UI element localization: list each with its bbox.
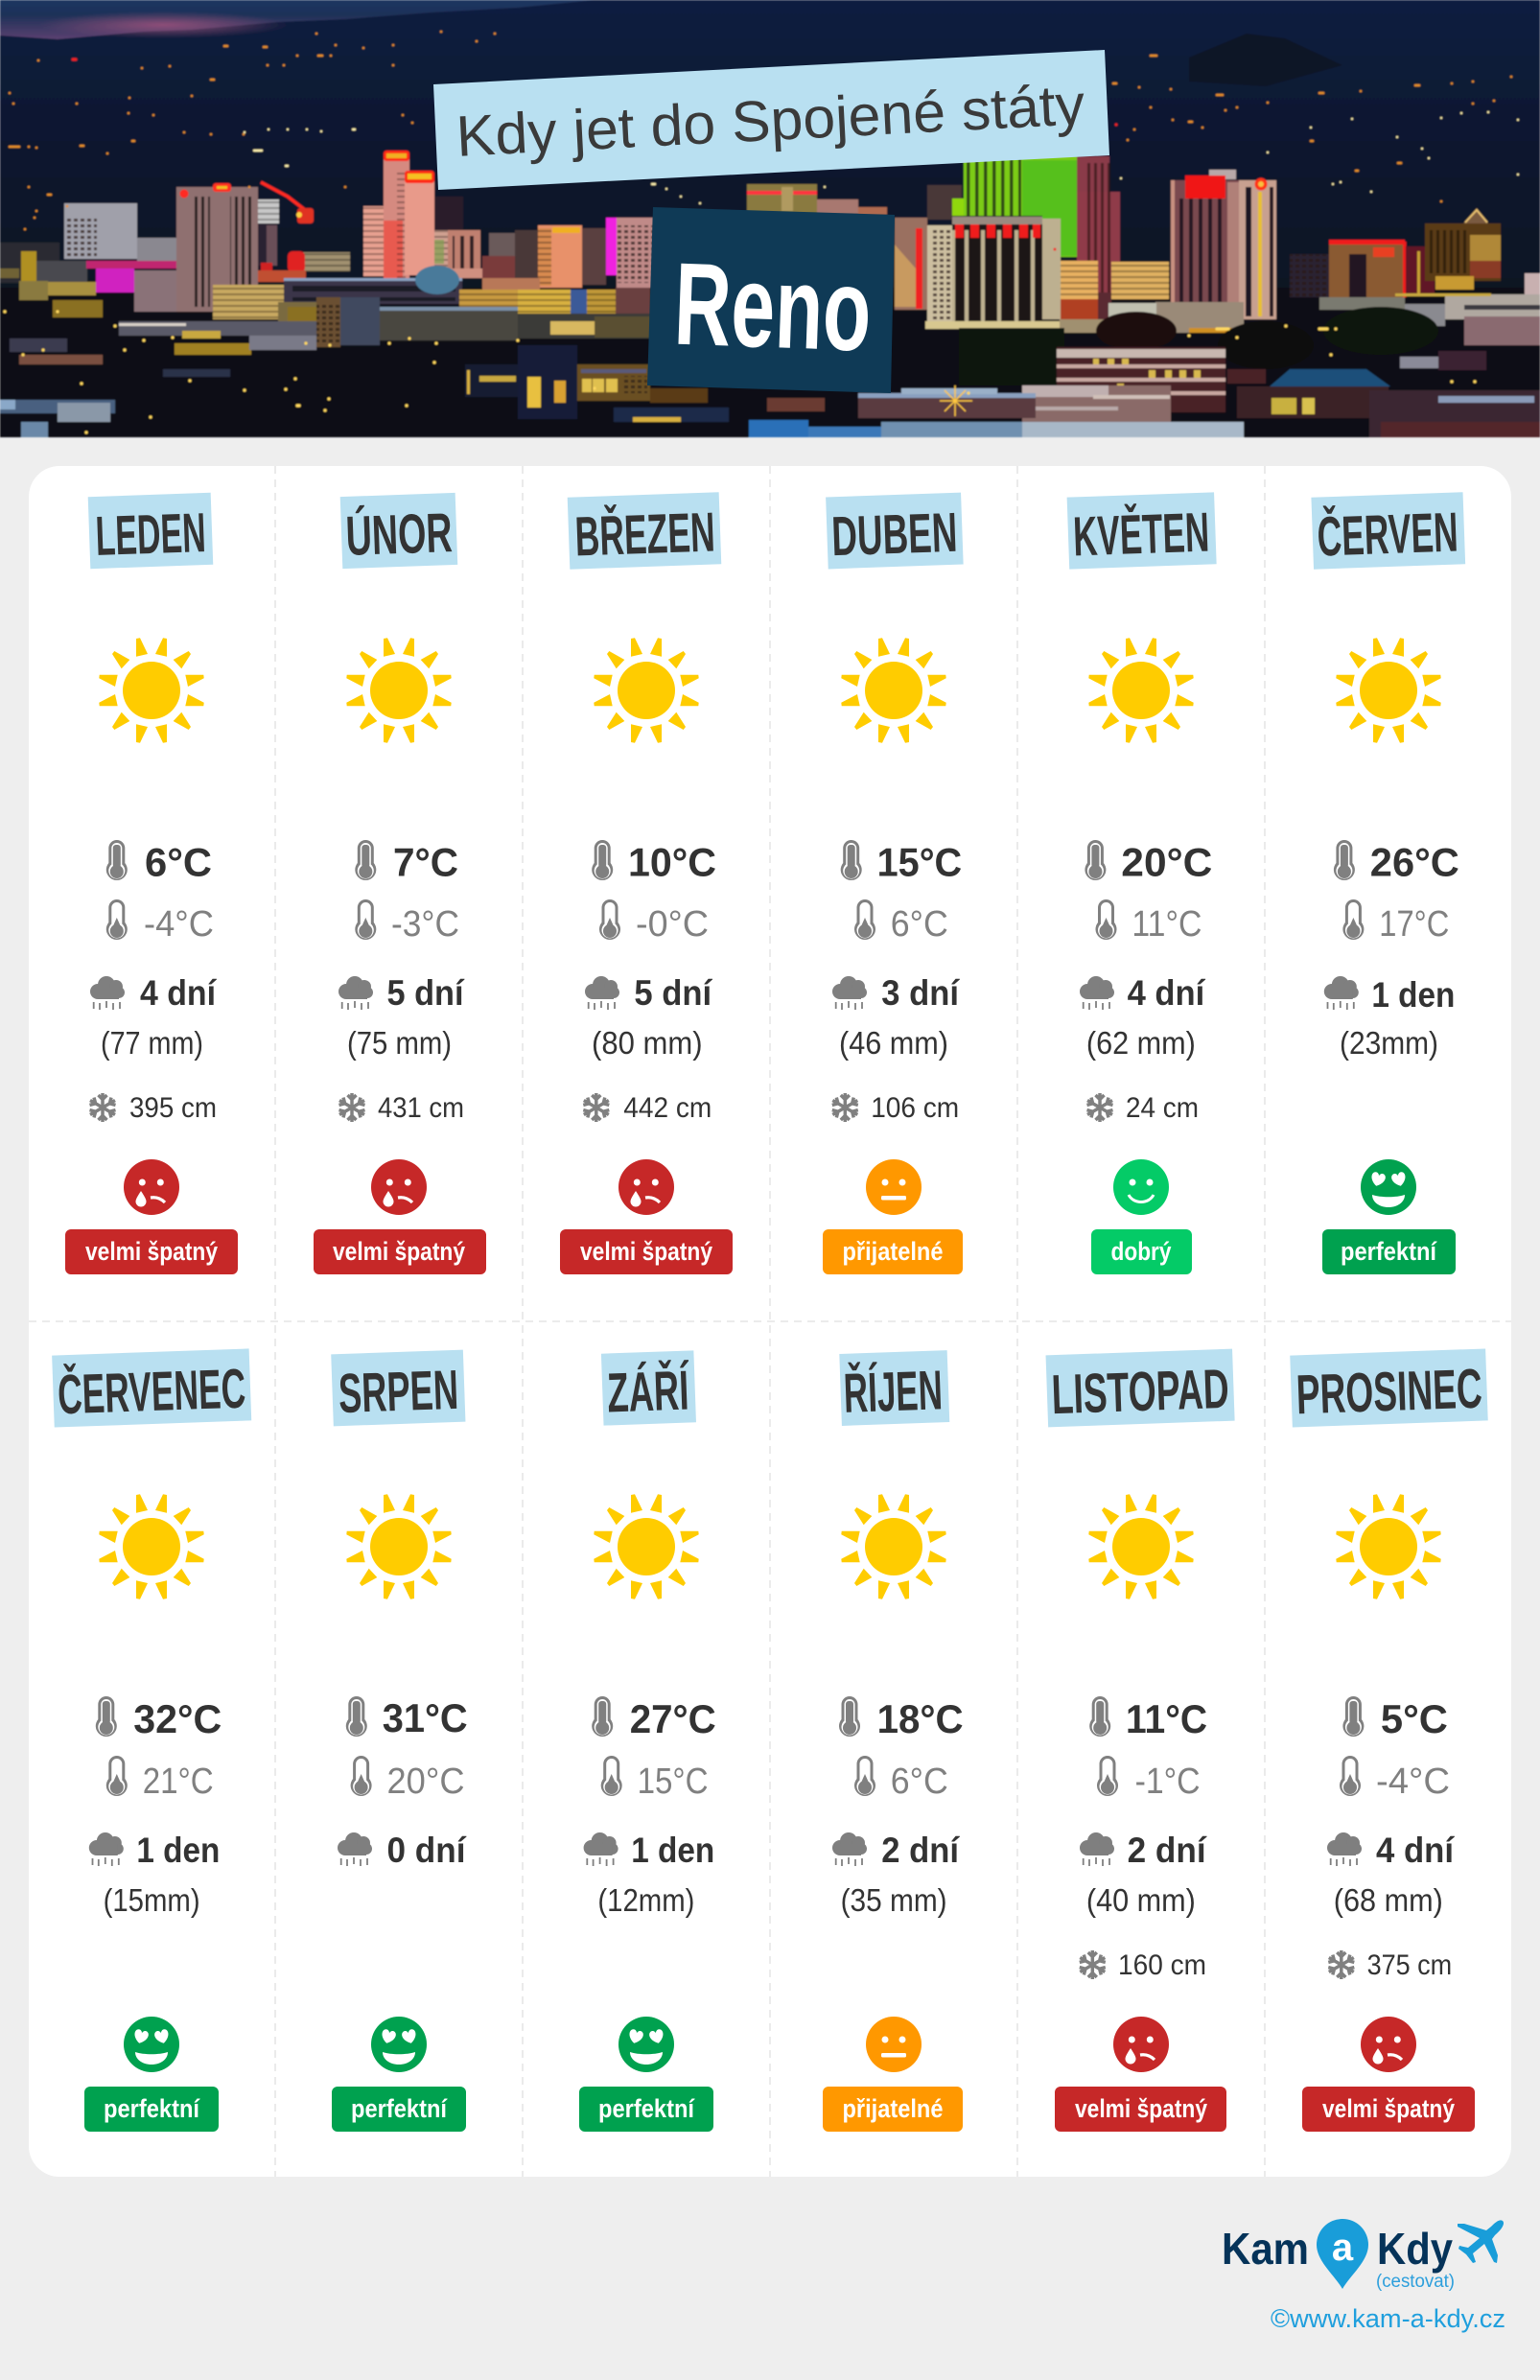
icon: rain cloud <box>338 1832 372 1866</box>
icon: min temperature thermometer <box>1097 1756 1118 1796</box>
min temperature: 15°C <box>638 1762 709 1802</box>
rainfall: (75 mm) <box>347 1025 452 1061</box>
month label: cervenec <box>52 1348 251 1428</box>
rainfall: (23mm) <box>1340 1025 1438 1061</box>
rating badge <box>1322 1229 1456 1274</box>
icon: heart-eyes face <box>124 2017 179 2072</box>
icon: max temperature thermometer <box>1085 840 1106 880</box>
month label: rijen: ŘÍJEN <box>843 1359 944 1425</box>
header photo: Reno skyline at dusk <box>0 0 1540 437</box>
icon: snowflake <box>88 1093 117 1122</box>
month label: leden: LEDEN <box>95 502 207 568</box>
rating badge <box>823 2087 963 2132</box>
month label: zari: ZÁŘÍ <box>606 1360 691 1424</box>
icon: max temperature thermometer <box>1342 1696 1364 1737</box>
month label: brezen <box>568 492 721 570</box>
Harrahs tower <box>363 206 384 276</box>
snowfall: 24 cm <box>1126 1092 1199 1124</box>
icon: min temperature thermometer <box>106 899 128 940</box>
city name badge: Reno <box>672 239 874 376</box>
min temperature: 20°C <box>387 1762 464 1802</box>
icon: max temperature thermometer <box>841 840 862 880</box>
icon: max temperature thermometer <box>1334 840 1355 880</box>
rainfall: (15mm) <box>104 1882 200 1918</box>
month label: zari <box>601 1350 696 1426</box>
icon: max temperature thermometer <box>592 840 613 880</box>
icon: snowflake <box>338 1093 366 1122</box>
icon: rain cloud <box>584 1832 618 1866</box>
rainfall: (46 mm) <box>839 1025 948 1061</box>
rating badge: přijatelné <box>842 2094 944 2123</box>
max temperature: 10°C <box>628 840 716 884</box>
rating badge: velmi špatný <box>333 1237 465 1266</box>
icon: rain cloud <box>1324 976 1359 1010</box>
month label: kveten <box>1067 492 1217 570</box>
panel: brezen <box>560 492 733 1274</box>
icon: sun <box>346 638 452 743</box>
max temperature: 32°C <box>133 1696 222 1741</box>
max temperature: 18°C <box>877 1696 964 1741</box>
title banner <box>433 50 1109 190</box>
panel: zari <box>579 1350 716 2132</box>
icon: sun <box>1088 638 1194 743</box>
panel: duben <box>823 493 964 1274</box>
rainy days: 2 dní <box>881 1831 961 1870</box>
min temperature: -4°C <box>1376 1762 1450 1802</box>
icon: sun <box>346 1494 452 1599</box>
panel: rijen <box>823 1350 964 2132</box>
min temperature: -4°C <box>144 904 214 945</box>
month label: duben <box>826 493 964 569</box>
icon: sun <box>99 638 204 743</box>
rainy days: 1 den <box>1371 975 1455 1015</box>
rainy days: 5 dní <box>387 973 465 1013</box>
icon: min temperature thermometer <box>1342 899 1364 940</box>
min temperature: -0°C <box>636 904 709 945</box>
icon: rain cloud <box>89 1832 124 1866</box>
month label: leden <box>88 493 213 569</box>
icon: max temperature thermometer <box>839 1696 860 1737</box>
icon: neutral face <box>866 2017 922 2072</box>
rainy days: 2 dní <box>1128 1831 1207 1870</box>
panel: cerven <box>1311 492 1465 1274</box>
panel: srpen <box>331 1350 468 2132</box>
icon: rain cloud <box>90 976 125 1010</box>
max temperature: 31°C <box>383 1695 468 1740</box>
rating badge <box>823 1229 963 1274</box>
icon: min temperature thermometer <box>854 1756 875 1796</box>
icon: rain cloud <box>832 976 867 1010</box>
Circus Circus and Eldorado <box>895 218 927 310</box>
icon: crying face <box>618 1159 674 1215</box>
month label: unor <box>340 493 457 569</box>
rainy days: 0 dní <box>387 1831 467 1870</box>
foreground buildings <box>1057 347 1225 412</box>
icon: min temperature thermometer <box>599 899 620 940</box>
rainfall: (80 mm) <box>592 1025 703 1061</box>
icon: rain cloud <box>832 1832 867 1866</box>
icon: sun <box>594 1494 699 1599</box>
rating badge: velmi špatný <box>580 1237 712 1266</box>
rating badge <box>84 2087 219 2132</box>
row: January to June <box>65 492 1465 1274</box>
icon: sun <box>1336 638 1441 743</box>
panel: kveten <box>1067 492 1217 1274</box>
icon: crying face <box>1113 2017 1169 2072</box>
rainy days: 4 dní <box>1128 973 1206 1013</box>
icon: smiling face <box>1113 1159 1169 1215</box>
month label: rijen <box>839 1350 949 1426</box>
rainfall: (12mm) <box>597 1882 694 1918</box>
rating badge <box>1055 2087 1226 2132</box>
max temperature: 11°C <box>1126 1696 1207 1741</box>
rainy days: 1 den <box>631 1831 714 1870</box>
icon: rain cloud <box>1327 1832 1362 1866</box>
rating badge <box>65 1229 238 1274</box>
icon: max temperature thermometer <box>346 1696 367 1737</box>
panel: leden <box>65 493 238 1274</box>
icon: snowflake <box>1327 1950 1356 1979</box>
right casinos <box>1290 254 1349 297</box>
icon: neutral face <box>866 1159 922 1215</box>
month label: cervenec: ČERVENEC <box>57 1358 246 1426</box>
rainfall: (77 mm) <box>101 1025 203 1061</box>
snowfall: 395 cm <box>129 1092 217 1124</box>
max temperature: 7°C <box>393 840 458 884</box>
logo: Kam a Kdy: (cestovat) <box>1376 2272 1455 2292</box>
center <box>518 290 571 314</box>
icon: min temperature thermometer <box>1340 1756 1361 1796</box>
snowfall: 442 cm <box>623 1092 712 1124</box>
row: July to December <box>52 1348 1488 2132</box>
max temperature: 6°C <box>145 840 212 884</box>
icon: min temperature thermometer <box>1095 899 1116 940</box>
icon: rain cloud <box>585 976 619 1010</box>
month label: listopad <box>1046 1349 1235 1427</box>
city name badge <box>647 207 895 393</box>
logo: Kam a Kdy <box>1222 2219 1504 2292</box>
icon: airplane <box>1458 2220 1504 2263</box>
rating badge: přijatelné <box>842 1237 944 1266</box>
rating badge: perfektní <box>1341 1237 1437 1266</box>
snowfall: 431 cm <box>378 1092 464 1124</box>
icon: map pin: a <box>1332 2227 1354 2269</box>
icon: sun <box>99 1494 204 1599</box>
far-left low buildings <box>0 243 59 283</box>
rainfall: (40 mm) <box>1086 1882 1196 1918</box>
min temperature: -1°C <box>1135 1762 1201 1802</box>
panel: monthly calendar card <box>29 466 1511 2177</box>
rating badge <box>332 2087 466 2132</box>
month label: srpen: SRPEN <box>338 1359 459 1425</box>
rainy days: 5 dní <box>634 973 713 1013</box>
snowfall: 160 cm <box>1118 1949 1206 1981</box>
icon: snowflake <box>830 1093 860 1122</box>
icon: min temperature thermometer <box>351 1756 372 1796</box>
rating badge <box>314 1229 486 1274</box>
rating badge <box>579 2087 713 2132</box>
max temperature: 27°C <box>630 1696 716 1741</box>
min temperature: 6°C <box>891 904 948 945</box>
month label: cerven <box>1311 492 1465 570</box>
panel: listopad <box>1046 1349 1235 2132</box>
rating badge: velmi špatný <box>85 1237 218 1266</box>
rainfall: (35 mm) <box>841 1882 947 1918</box>
rating badge: dobrý <box>1110 1237 1172 1266</box>
icon: heart-eyes face <box>618 2017 674 2072</box>
rainy days: 3 dní <box>881 973 961 1013</box>
Silver Legacy tower <box>1171 180 1276 319</box>
icon: crying face <box>124 1159 179 1215</box>
foreground trees <box>959 328 1064 385</box>
icon: max temperature thermometer <box>106 840 128 880</box>
month label: srpen <box>331 1350 465 1426</box>
icon: crying face <box>371 1159 427 1215</box>
icon: heart-eyes face <box>1361 1159 1416 1215</box>
logo: Kam a Kdy: Kdy <box>1377 2224 1453 2274</box>
max temperature: 26°C <box>1370 840 1459 884</box>
month label: brezen: BŘEZEN <box>574 501 716 569</box>
logo: Kam a Kdy: Kam <box>1222 2224 1309 2274</box>
icon: max temperature thermometer <box>592 1696 613 1737</box>
panel: unor <box>314 493 486 1274</box>
rating badge: perfektní <box>104 2094 200 2123</box>
rainy days: 1 den <box>136 1831 220 1870</box>
title banner: Kdy jet do Spojené státy <box>455 72 1086 169</box>
max temperature: 15°C <box>877 840 962 884</box>
panel: cervenec <box>52 1348 251 2132</box>
icon: max temperature thermometer <box>355 840 376 880</box>
icon: crying face <box>1361 2017 1416 2072</box>
panel: prosinec <box>1290 1348 1488 2132</box>
website credit: ©www.kam-a-kdy.cz <box>1271 2304 1505 2333</box>
icon: map pin <box>1317 2219 1368 2289</box>
icon: rain cloud <box>1080 976 1114 1010</box>
icon: sun <box>841 638 946 743</box>
rainfall: (62 mm) <box>1086 1025 1196 1061</box>
icon: heart-eyes face <box>371 2017 427 2072</box>
month label: kveten: KVĚTEN <box>1072 502 1210 568</box>
icon: sun <box>1088 1494 1194 1599</box>
icon: sun <box>1336 1494 1441 1599</box>
min temperature: 6°C <box>891 1762 948 1802</box>
rating badge: velmi špatný <box>1075 2094 1207 2123</box>
month label: unor: ÚNOR <box>345 502 454 568</box>
icon: rain cloud <box>338 976 373 1010</box>
rating badge <box>1302 2087 1475 2132</box>
min temperature: -3°C <box>391 904 459 945</box>
convention hall <box>284 278 462 304</box>
rating badge <box>560 1229 733 1274</box>
icon: min temperature thermometer <box>854 899 875 940</box>
icon: min temperature thermometer <box>106 1756 128 1796</box>
month label: duben: DUBEN <box>830 502 958 568</box>
icon: snowflake <box>582 1093 611 1122</box>
icon: max temperature thermometer <box>1089 1696 1110 1737</box>
min temperature: 11°C <box>1132 904 1202 945</box>
min temperature: 17°C <box>1379 904 1449 945</box>
left foreground <box>119 321 316 336</box>
max temperature: 20°C <box>1121 840 1212 884</box>
icon: snowflake <box>1078 1950 1108 1979</box>
icon: sun <box>594 638 699 743</box>
icon: snowflake <box>1085 1093 1114 1122</box>
min temperature: 21°C <box>143 1762 214 1802</box>
icon: min temperature thermometer <box>601 1756 622 1796</box>
icon: min temperature thermometer <box>355 899 376 940</box>
max temperature: 5°C <box>1381 1696 1448 1741</box>
rating badge <box>1091 1229 1192 1274</box>
rating badge: velmi špatný <box>1322 2094 1455 2123</box>
rating badge: perfektní <box>598 2094 695 2123</box>
month label: listopad: LISTOPAD <box>1051 1358 1230 1426</box>
rainy days: 4 dní <box>140 973 218 1013</box>
rainfall: (68 mm) <box>1334 1882 1443 1918</box>
icon: max temperature thermometer <box>96 1696 117 1737</box>
snowfall: 375 cm <box>1367 1949 1452 1981</box>
rainy days: 4 dní <box>1376 1831 1456 1870</box>
rating badge: perfektní <box>351 2094 448 2123</box>
icon: sun <box>841 1494 946 1599</box>
icon: rain cloud <box>1080 1832 1114 1866</box>
snowfall: 106 cm <box>871 1092 959 1124</box>
